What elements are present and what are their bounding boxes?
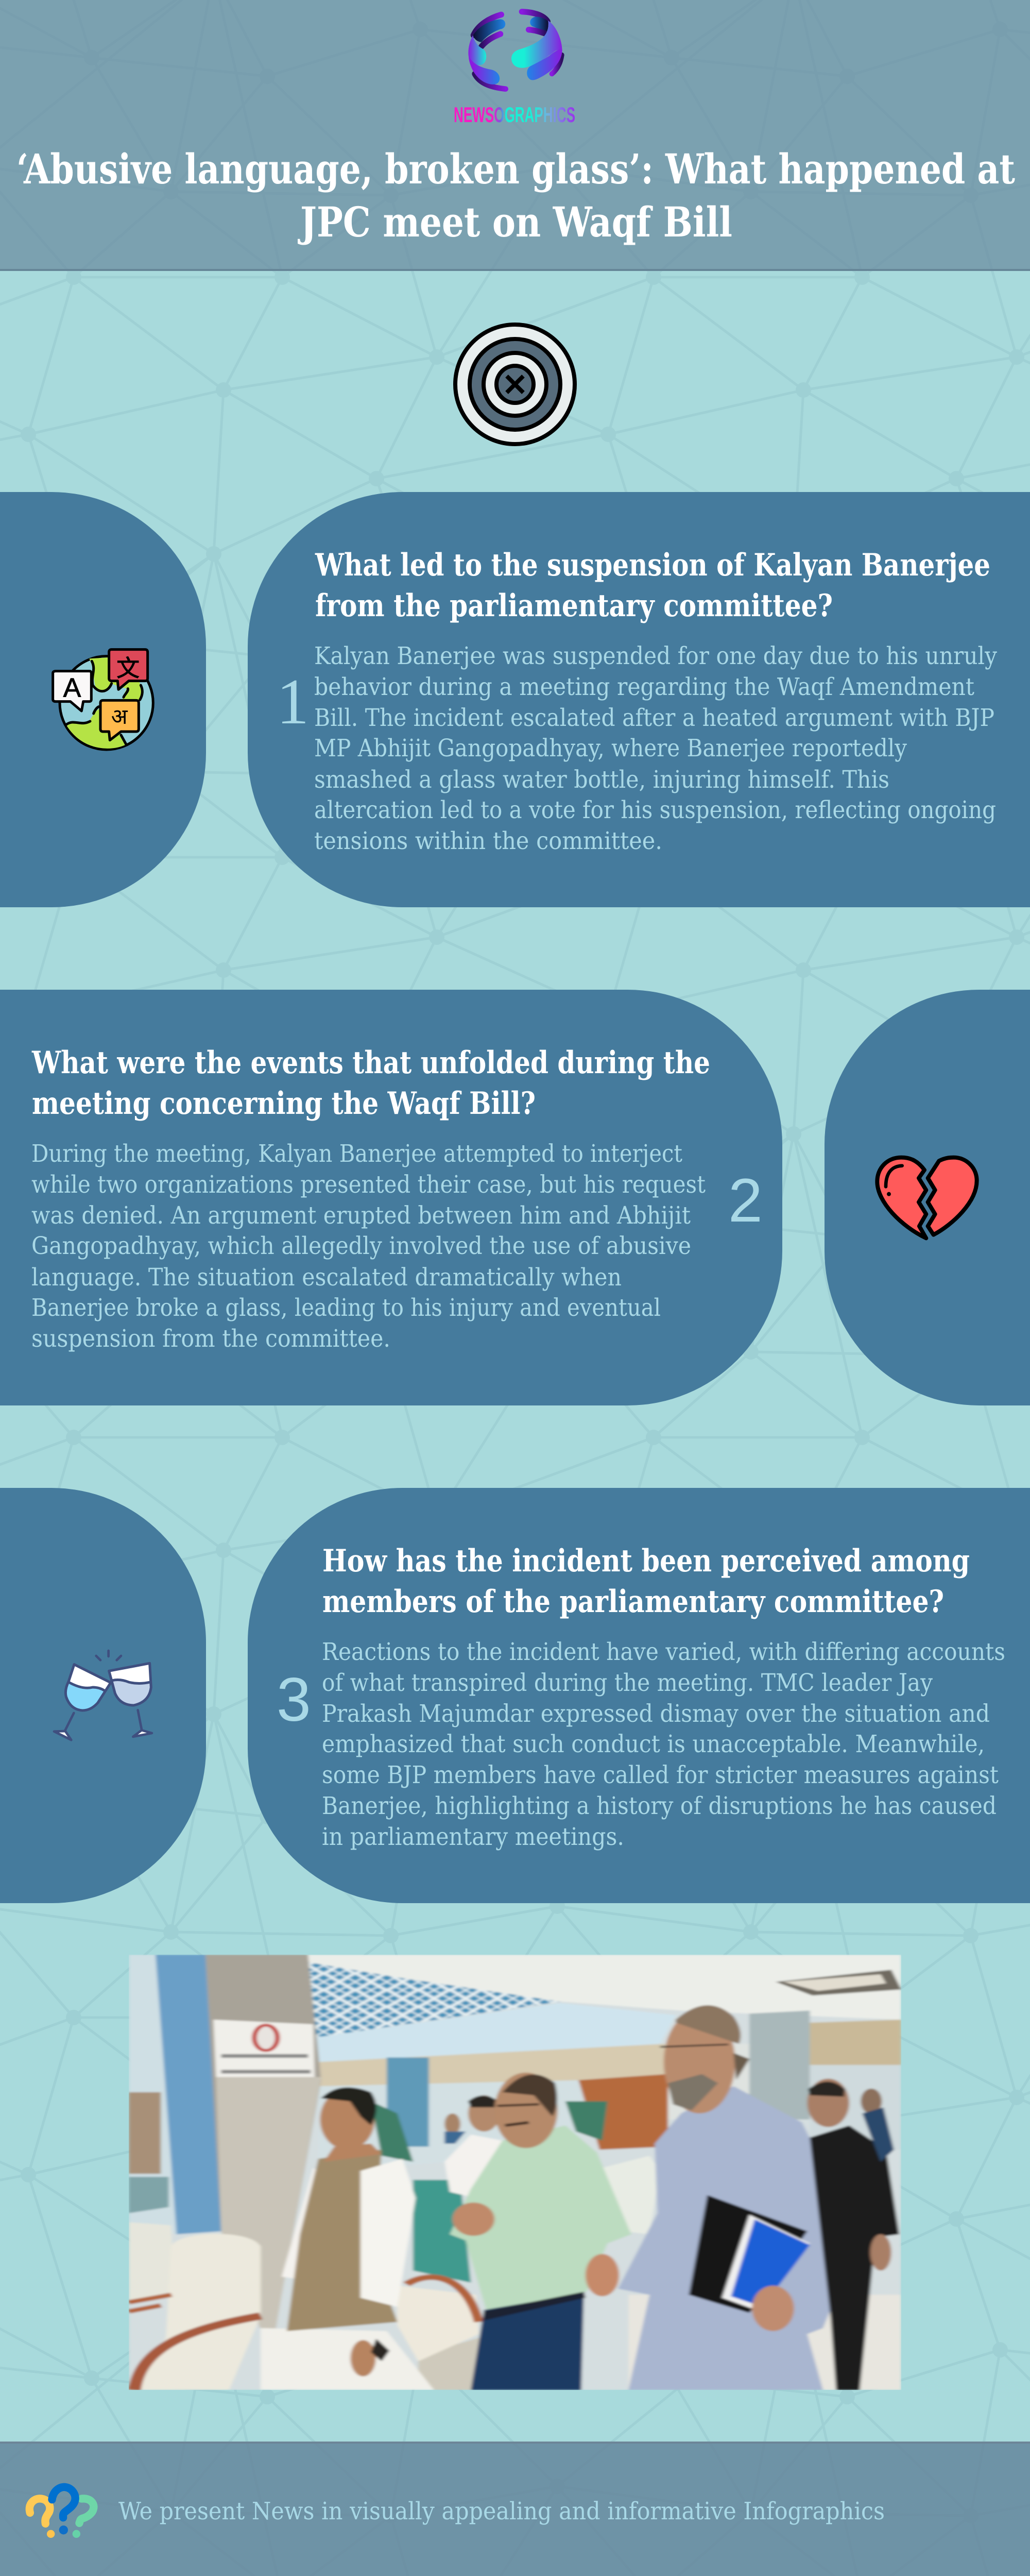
photo: politicians walking through parliament corridor bbox=[129, 1955, 901, 2390]
text block: section 1: smashed a glass water bottle, injuring himself. This bbox=[314, 766, 889, 794]
title bbox=[16, 145, 1015, 246]
panel: section 3 text bbox=[248, 1488, 1030, 1903]
text block: section 2 bbox=[31, 1140, 706, 1353]
text block: section 1: behavior during a meeting regarding the Waqf Amendment bbox=[314, 673, 974, 701]
icon: translation globe: अ bbox=[111, 704, 128, 729]
heading: section 1: from the parliamentary committee? bbox=[315, 588, 833, 624]
number 3: 3 bbox=[277, 1665, 311, 1734]
text block: section 3: in parliamentary meetings. bbox=[322, 1823, 624, 1851]
number 1: 1 bbox=[277, 666, 309, 738]
heading: section 2 bbox=[31, 1045, 710, 1122]
text block: section 2: suspension from the committee. bbox=[31, 1325, 390, 1353]
panel: section 1 icon bbox=[0, 492, 206, 907]
panel: header band bbox=[0, 0, 1030, 271]
icon: question marks bbox=[29, 2487, 94, 2538]
text block: section 2: During the meeting, Kalyan Banerjee attempted to interject bbox=[31, 1140, 682, 1168]
text block: section 1 bbox=[314, 642, 997, 855]
panel: section 3 icon bbox=[0, 1488, 206, 1903]
icon: broken heart bbox=[877, 1158, 977, 1238]
text block: section 2: language. The situation escalated dramatically when bbox=[31, 1263, 622, 1292]
text block: section 2: Gangopadhyay, which allegedly involved the use of abusive bbox=[31, 1232, 691, 1260]
text block: section 2: was denied. An argument erupted between him and Abhijit bbox=[31, 1201, 691, 1230]
panel: section 1 text bbox=[248, 492, 1030, 907]
heading: section 1 bbox=[315, 547, 990, 624]
panel: section 2 text bbox=[0, 990, 782, 1405]
number 2: 2 bbox=[728, 1166, 763, 1235]
title: JPC meet on Waqf Bill bbox=[298, 198, 732, 246]
text block: section 2: while two organizations presented their case, but his request bbox=[31, 1171, 706, 1199]
logo: header Newsographics: NEWSOGRAPHICS bbox=[454, 103, 575, 127]
heading: section 2: meeting concerning the Waqf Bill? bbox=[32, 1086, 536, 1122]
panel: tagline band bbox=[0, 2442, 1030, 2576]
icon: target bbox=[455, 325, 575, 444]
text block: section 3 bbox=[322, 1638, 1005, 1851]
text block: section 1: tensions within the committee. bbox=[314, 827, 662, 855]
heading: section 3 bbox=[322, 1543, 970, 1620]
icon: clinking glasses bbox=[54, 1651, 152, 1740]
icon: translation globe: 文 bbox=[116, 650, 140, 683]
text block: section 2: Banerjee broke a glass, leading to his injury and eventual bbox=[31, 1294, 661, 1322]
tagline: We present News in visually appealing and informative Infographics bbox=[118, 2497, 885, 2526]
icon: translation globe: A bbox=[63, 673, 81, 703]
text block: section 3: of what transpired during the meeting. TMC leader Jay bbox=[322, 1669, 933, 1697]
text block: section 1: MP Abhijit Gangopadhyay, where Banerjee reportedly bbox=[314, 734, 907, 762]
icon: translation globe bbox=[53, 650, 153, 750]
heading: section 2: What were the events that unfolded during the bbox=[31, 1045, 710, 1081]
logo: header Newsographics bbox=[454, 12, 575, 127]
panel: section 2 icon bbox=[825, 990, 1030, 1405]
